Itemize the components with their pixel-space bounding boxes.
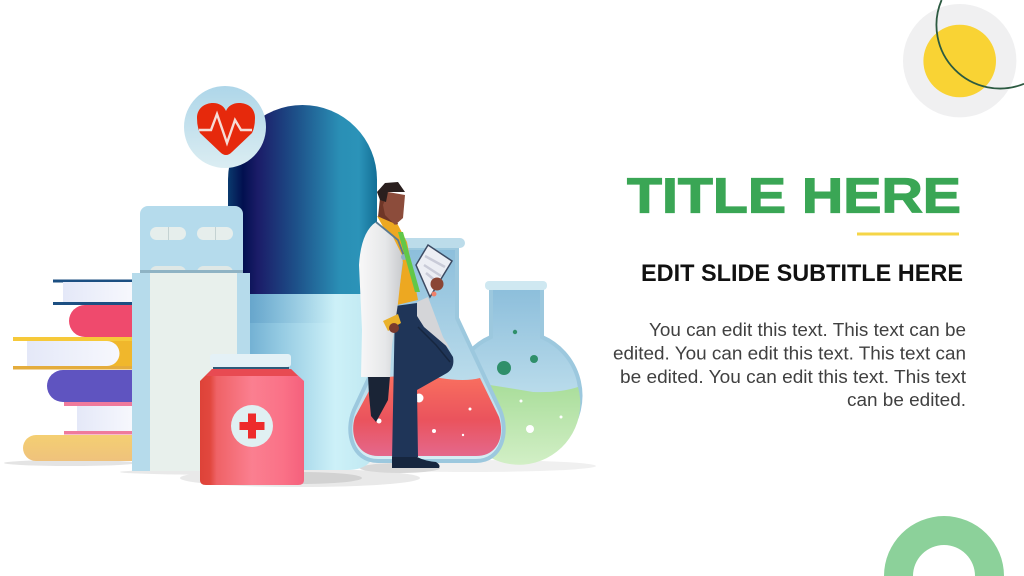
shirt xyxy=(377,216,418,305)
icon: giant capsule xyxy=(228,105,377,470)
body text: can be edited. xyxy=(847,389,966,410)
body text: be edited. You can edit this text. This text xyxy=(620,366,966,387)
icon: jar with red cross xyxy=(200,354,304,485)
body text: You can edit this text. This text can be xyxy=(649,319,966,340)
title underline xyxy=(857,232,959,236)
ground shadows xyxy=(4,460,596,487)
icon: flask with red liquid xyxy=(350,238,504,461)
illustration: medical scene xyxy=(4,86,596,487)
shoe xyxy=(392,457,440,468)
body text xyxy=(613,319,966,410)
decor: bottom right ring xyxy=(884,516,1004,576)
icon: stack of books xyxy=(13,280,133,461)
head xyxy=(383,192,405,225)
figure: doctor with clipboard xyxy=(359,182,453,468)
title: TITLE HERE xyxy=(627,170,961,224)
body text: edited. You can edit this text. This text can xyxy=(613,342,966,364)
stethoscope xyxy=(376,222,404,256)
neck xyxy=(378,198,398,228)
icon: blister pack in box xyxy=(132,206,250,471)
bent lower leg and shoe xyxy=(368,376,390,422)
icon: flask with green liquid xyxy=(452,281,580,465)
trousers xyxy=(392,303,453,460)
coat xyxy=(359,222,403,377)
clipboard xyxy=(416,245,452,297)
tie xyxy=(398,232,420,292)
icon: heart badge xyxy=(184,86,266,168)
decor: top right circles xyxy=(903,0,1024,117)
cuff and hand xyxy=(383,314,401,331)
subtitle: EDIT SLIDE SUBTITLE HERE xyxy=(641,260,963,287)
